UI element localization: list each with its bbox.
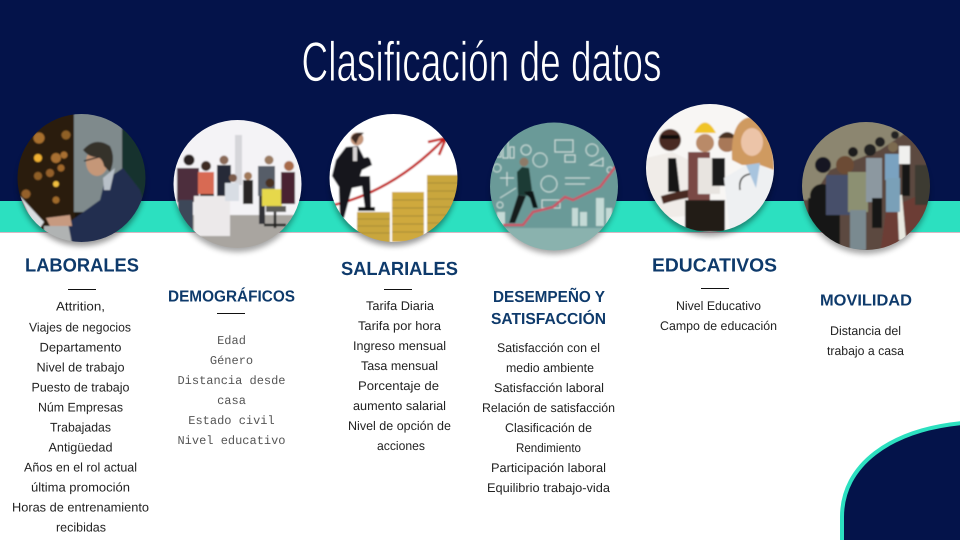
list: demográficos: Edad [217, 334, 246, 348]
list: movilidad: trabajo a casa [827, 344, 904, 358]
column: movilidad [820, 292, 912, 358]
list: demográficos: Estado civil [188, 414, 275, 428]
list: salariales: Porcentaje de [358, 379, 439, 393]
navy header background [0, 0, 960, 202]
list: educativos: Campo de educación [660, 319, 777, 333]
list: demográficos: Nivel educativo [177, 434, 286, 448]
list: salariales: Tasa mensual [361, 359, 438, 373]
heading: salariales: SALARIALES [341, 259, 458, 280]
column: salariales [341, 259, 458, 453]
heading: desempeño y satisfacción: DESEMPEÑO Y [493, 287, 605, 306]
list: desempeño y satisfacción: medio ambiente [506, 361, 594, 375]
photo: man climbing a chart on chalkboard [488, 120, 622, 254]
column: laborales [12, 256, 149, 534]
heading: demográficos: DEMOGRÁFICOS [168, 286, 295, 306]
list: desempeño y satisfacción [482, 341, 615, 495]
list: laborales: Viajes de negocios [29, 320, 131, 334]
list: educativos: Nivel Educativo [676, 299, 761, 313]
list: salariales: Nivel de opción de [348, 419, 451, 433]
list: salariales: aumento salarial [353, 399, 446, 413]
list: movilidad: Distancia del [830, 324, 901, 338]
list: laborales: Horas de entrenamiento [12, 500, 149, 514]
photo: office team [170, 118, 305, 252]
column: educativos [652, 256, 777, 333]
list: demográficos [177, 334, 286, 448]
list: salariales [348, 299, 451, 453]
teal band [0, 201, 960, 232]
photo: man at laptop [15, 112, 150, 246]
list: laborales: última promoción [31, 480, 130, 494]
heading: laborales: LABORALES [25, 256, 139, 276]
list: educativos [660, 299, 777, 333]
list: desempeño y satisfacción: Equilibrio trabajo-vida [487, 481, 610, 495]
list: laborales: Núm Empresas [38, 400, 123, 414]
list: laborales: Antigüedad [48, 440, 113, 454]
heading: movilidad: MOVILIDAD [820, 292, 912, 310]
list: movilidad [827, 324, 904, 358]
list: laborales [12, 300, 149, 534]
corner decoration [842, 423, 960, 540]
heading: desempeño y satisfacción: SATISFACCIÓN [491, 309, 606, 328]
list: desempeño y satisfacción: Relación de satisfacción [482, 401, 615, 415]
list: desempeño y satisfacción: Participación laboral [491, 461, 606, 475]
column: demográficos [168, 286, 295, 448]
list: laborales: Nivel de trabajo [36, 360, 125, 374]
photo: commuters on platform [800, 120, 934, 254]
list: laborales: recibidas [56, 520, 106, 534]
list: salariales: acciones [377, 439, 425, 453]
list: demográficos: Distancia desde [177, 374, 286, 388]
list: desempeño y satisfacción: Rendimiento [516, 441, 581, 455]
list: laborales: Departamento [40, 340, 122, 354]
list: salariales: Tarifa Diaria [366, 299, 434, 313]
column: desempeño y satisfacción [482, 287, 615, 495]
photo: man climbing coin stacks [325, 110, 463, 246]
list: laborales: Puesto de trabajo [32, 380, 130, 394]
list: laborales: Años en el rol actual [24, 460, 137, 474]
list: salariales: Tarifa por hora [358, 319, 441, 333]
list: desempeño y satisfacción: Satisfacción con el [497, 341, 600, 355]
list: desempeño y satisfacción: Clasificación de [505, 421, 592, 435]
list: salariales: Ingreso mensual [353, 339, 446, 353]
title: Clasificación de datos [302, 30, 662, 93]
list: demográficos: casa [217, 394, 246, 408]
list: laborales: Attrition, [56, 300, 105, 314]
list: laborales: Trabajadas [50, 420, 111, 434]
heading: desempeño y satisfacción [491, 287, 606, 328]
list: desempeño y satisfacción: Satisfacción laboral [494, 381, 604, 395]
photo: professionals group [644, 102, 778, 236]
list: demográficos: Género [210, 354, 253, 368]
heading: educativos: EDUCATIVOS [652, 256, 777, 276]
